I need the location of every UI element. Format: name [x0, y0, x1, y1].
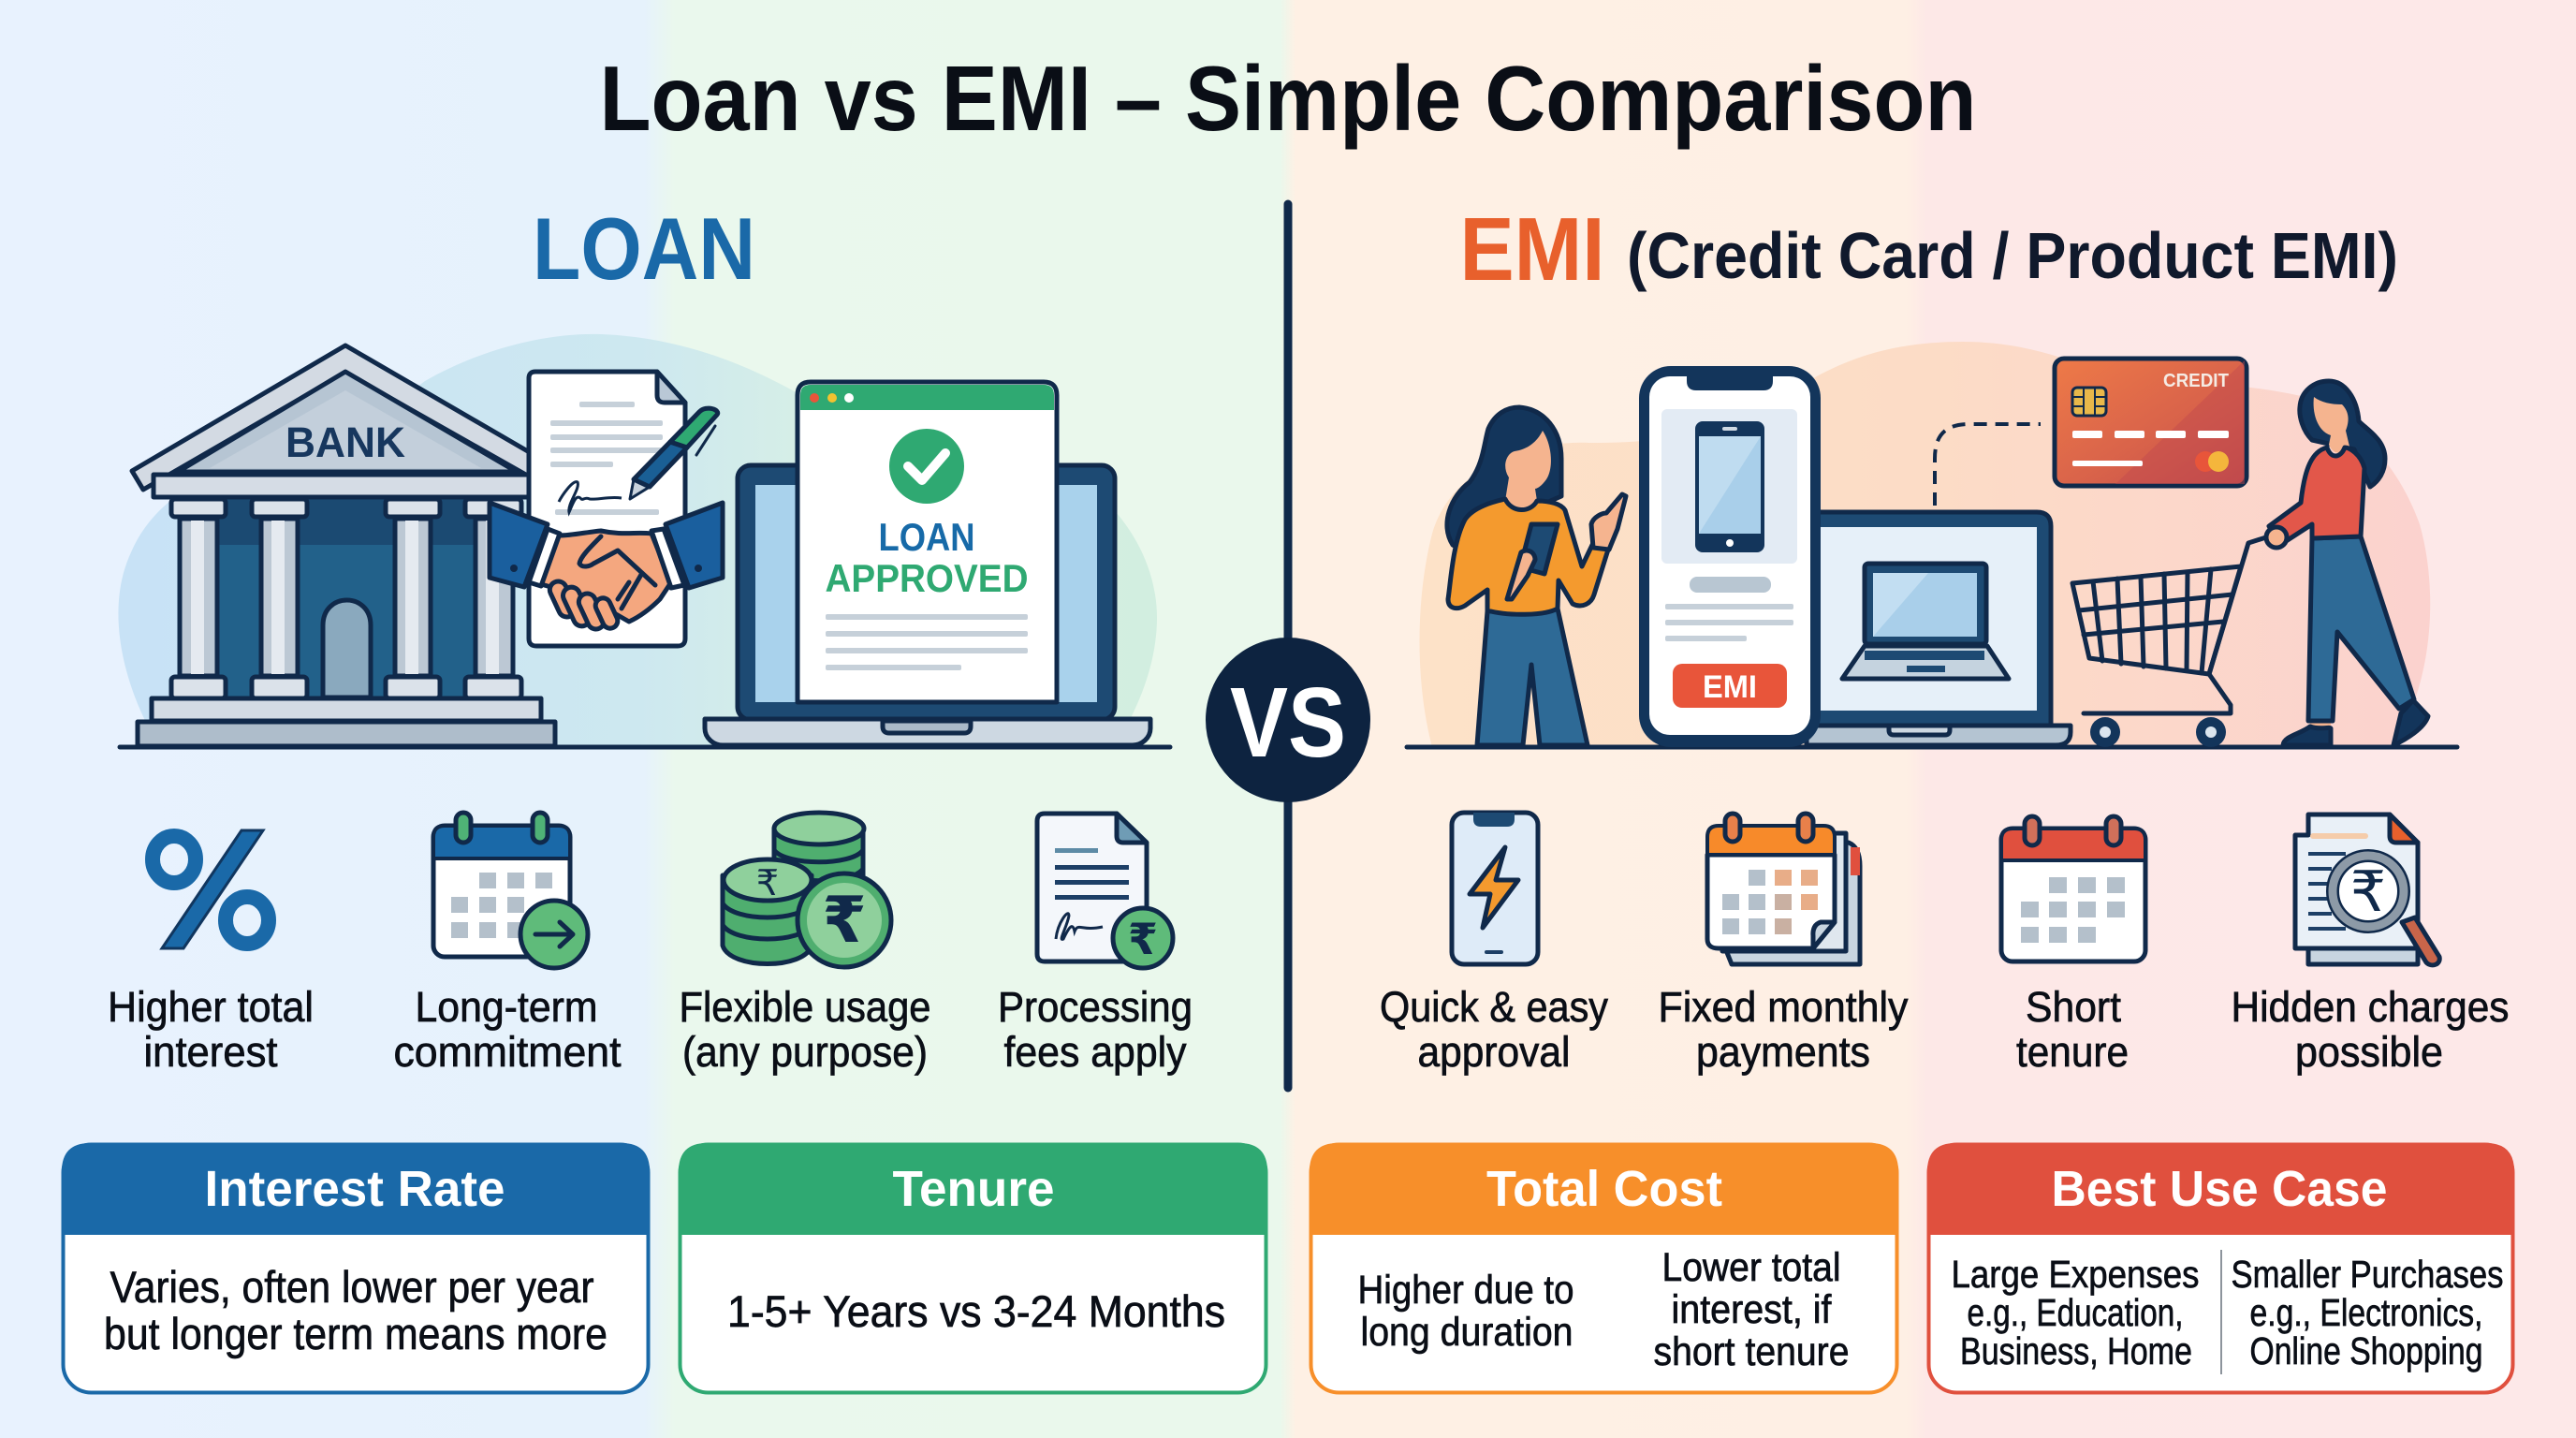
feature: flexible usage	[680, 813, 930, 1076]
icon: pen	[630, 408, 718, 499]
figure: woman with phone	[1447, 407, 1626, 745]
icon: bank building	[132, 345, 562, 746]
icon: document with magnifier	[2295, 814, 2439, 965]
card: best use case: Best Use Case	[2052, 1161, 2387, 1217]
feature: quick and easy approval: Quick & easy	[1380, 983, 1608, 1031]
card: total cost: Higher due to	[1357, 1268, 1574, 1313]
icon: credit card	[2055, 359, 2247, 486]
card: best use case: e.g., Education,	[1968, 1291, 2183, 1334]
icon: shopping cart	[2072, 536, 2269, 747]
icon: large phone with EMI button: EMI	[1703, 669, 1757, 705]
card: best use case: Online Shopping	[2250, 1329, 2482, 1372]
icon: document with rupee badge	[1037, 814, 1173, 968]
icon: credit card: CREDIT	[2163, 371, 2229, 391]
approval card	[798, 382, 1057, 702]
card: total cost: Lower total	[1662, 1245, 1840, 1290]
feature: hidden charges	[2232, 814, 2509, 1076]
feature: processing fees	[998, 814, 1193, 1076]
feature: long-term commitment: commitment	[393, 1028, 622, 1076]
card: interest rate: but longer term means more	[104, 1309, 607, 1358]
card: total cost	[1310, 1143, 1898, 1393]
divider with VS badge	[1206, 204, 1370, 1088]
feature: higher total interest: interest	[144, 1028, 278, 1076]
card: best use case: Business, Home	[1960, 1329, 2192, 1372]
feature: long-term commitment: Long-term	[416, 983, 597, 1031]
card: total cost: short tenure	[1653, 1329, 1850, 1374]
card: total cost: long duration	[1361, 1310, 1573, 1355]
card: total cost: interest, if	[1672, 1287, 1832, 1332]
icon: document with magnifier: ₹	[2350, 860, 2386, 923]
card: best use case: e.g., Electronics,	[2250, 1291, 2482, 1334]
heading: EMI (Credit Card / Product EMI)	[1460, 199, 2398, 300]
feature row: loan	[108, 813, 1193, 1076]
icon: stacked calendars	[1707, 814, 1860, 964]
backdrop blob: EMI	[1419, 342, 2430, 747]
heading: EMI (Credit Card / Product EMI): EMI	[1460, 199, 1604, 300]
feature: short tenure	[2001, 816, 2145, 1076]
feature: long-term commitment	[393, 813, 622, 1076]
icon: signed document	[529, 372, 685, 646]
icon: percent	[153, 830, 269, 948]
icon: calendar	[2001, 816, 2145, 961]
card: interest rate	[62, 1143, 650, 1393]
ground line: loan	[120, 745, 1170, 749]
heading: LOAN: LOAN	[533, 199, 755, 298]
feature: processing fees: Processing	[998, 983, 1193, 1031]
feature: short tenure: Short	[2026, 983, 2121, 1031]
feature: fixed monthly payments	[1659, 814, 1909, 1076]
feature: flexible usage: Flexible usage	[680, 983, 930, 1031]
card: total cost: Total Cost	[1486, 1161, 1722, 1217]
feature: quick and easy approval: approval	[1417, 1028, 1571, 1076]
title: Loan vs EMI – Simple Comparison	[599, 47, 1977, 150]
feature: higher total interest: Higher total	[108, 983, 314, 1031]
feature: short tenure: tenure	[2016, 1028, 2129, 1076]
icon: bank building: BANK	[285, 418, 405, 466]
card: tenure: 1-5+ Years vs 3-24 Months	[727, 1286, 1225, 1336]
card: interest rate: Interest Rate	[204, 1161, 505, 1217]
feature: hidden charges: Hidden charges	[2232, 983, 2509, 1031]
icon: rupee coin stacks	[723, 813, 891, 967]
connector: dashed line to card	[1935, 424, 2041, 506]
card: best use case: Smaller Purchases	[2232, 1253, 2503, 1296]
card: best use case	[1927, 1143, 2514, 1393]
icon: calendar with arrow	[433, 813, 588, 968]
icon: phone with lightning bolt	[1452, 813, 1538, 964]
divider with VS badge: VS	[1230, 668, 1346, 778]
illustration: loan scene	[118, 334, 1170, 747]
illustration: EMI scene	[1407, 342, 2457, 747]
icon: rupee coin stacks: ₹	[756, 864, 779, 903]
card: best use case: Large Expenses	[1951, 1253, 2200, 1296]
feature: hidden charges: possible	[2295, 1028, 2443, 1076]
feature: fixed monthly payments: Fixed monthly	[1659, 983, 1909, 1031]
figure: woman with cart	[2266, 381, 2428, 745]
icon: mini laptop	[1842, 564, 2009, 679]
icon: document with rupee badge: ₹	[1128, 915, 1158, 963]
card: interest rate: Varies, often lower per year	[110, 1262, 593, 1312]
approval card: APPROVED	[826, 556, 1028, 600]
feature: flexible usage: (any purpose)	[682, 1028, 928, 1076]
approval card: LOAN	[878, 515, 975, 559]
feature row: EMI	[1380, 813, 2509, 1076]
feature: higher total interest	[108, 830, 314, 1076]
feature: fixed monthly payments: payments	[1696, 1028, 1870, 1076]
icon: laptop with approval card	[705, 382, 1150, 745]
card: tenure	[679, 1143, 1267, 1393]
card: tenure: Tenure	[893, 1161, 1054, 1217]
icon: rupee coin stacks: ₹	[822, 885, 867, 956]
backdrop blob: loan	[118, 334, 1157, 747]
feature: quick and easy approval	[1380, 813, 1608, 1076]
feature: processing fees: fees apply	[1003, 1028, 1187, 1076]
icon: large laptop	[1807, 512, 2071, 745]
icon: handshake	[490, 503, 723, 632]
ground line: EMI	[1407, 745, 2457, 749]
heading: EMI (Credit Card / Product EMI): (Credit Card / Product EMI)	[1627, 219, 2398, 292]
icon: large phone with EMI button	[1639, 366, 1821, 747]
